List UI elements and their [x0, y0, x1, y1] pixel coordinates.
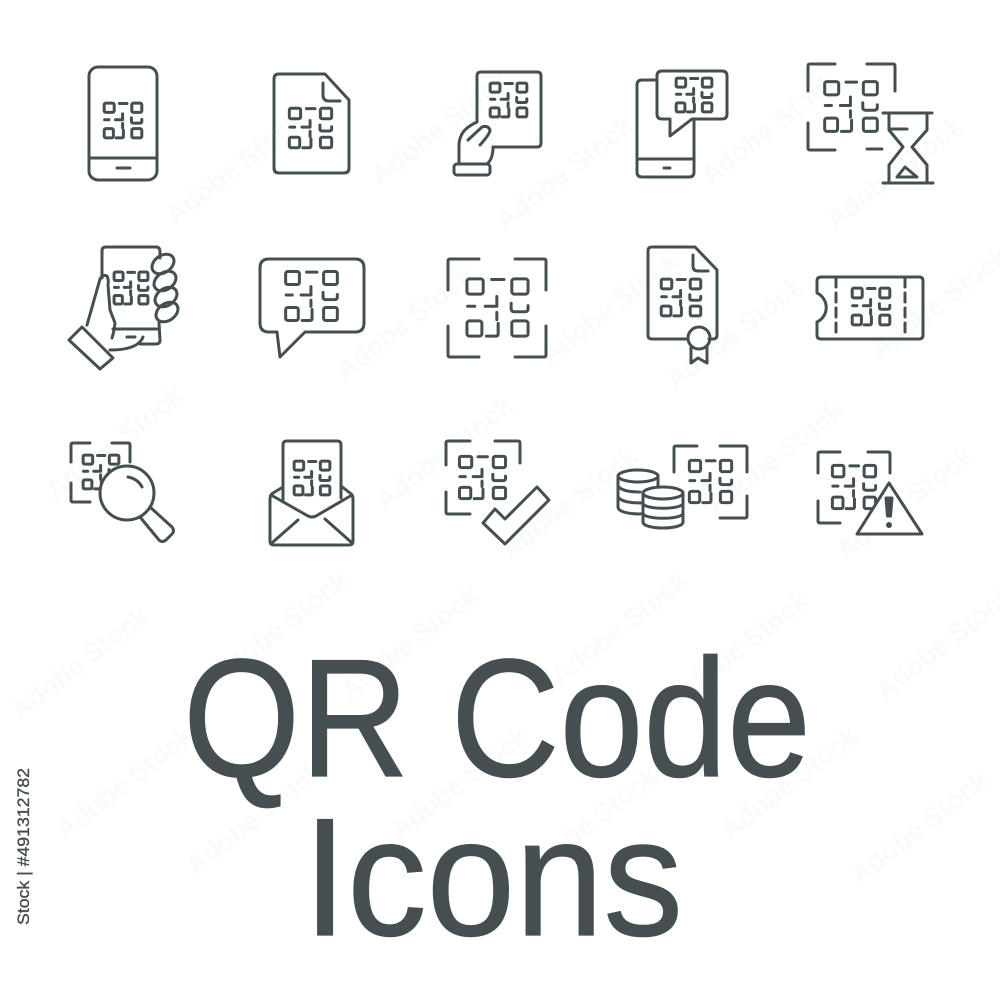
watermark: Adobe Stock	[330, 260, 479, 386]
watermark: Adobe Stock	[205, 565, 354, 691]
icon: hand holding QR card	[454, 72, 541, 175]
watermark: Adobe Stock	[495, 440, 644, 566]
watermark: Adobe Stock	[5, 600, 154, 726]
icon: smartphone with QR speech bubble	[637, 71, 727, 177]
watermark: Adobe Stock	[365, 65, 514, 191]
icon: QR code with warning triangle	[818, 452, 922, 534]
stock id: Stock | #491312782	[14, 768, 33, 925]
watermark: Adobe Stock	[515, 760, 664, 886]
watermark: Adobe Stock	[385, 720, 534, 846]
watermark: Adobe Stock	[820, 110, 969, 236]
icon: hand holding phone with QR code	[69, 247, 182, 369]
title: Icons	[303, 783, 683, 971]
watermark: Adobe Stock	[335, 580, 484, 706]
watermark: Adobe Stock	[660, 270, 809, 396]
watermark: Adobe Stock	[545, 565, 694, 691]
watermark: Adobe Stock	[535, 245, 684, 371]
title: QR Code	[183, 624, 811, 812]
watermark: Adobe Stock	[695, 65, 844, 191]
watermark: Adobe Stock	[370, 390, 519, 516]
icon: QR scan with hourglass	[808, 64, 933, 183]
watermark: Adobe Stock	[180, 755, 329, 881]
watermark: Adobe Stock	[845, 765, 994, 891]
watermark: Adobe Stock	[665, 585, 814, 711]
icon: envelope with QR code	[270, 441, 353, 545]
icon: speech bubble with QR code	[260, 259, 364, 357]
watermark: Adobe Stock	[830, 440, 979, 566]
icon: QR code with magnifying glass	[71, 443, 174, 542]
icon: smartphone with QR code	[89, 67, 157, 180]
icon: ticket with QR code	[817, 277, 923, 339]
watermark: Adobe Stock	[490, 110, 639, 236]
icon: certified QR document	[648, 247, 717, 363]
watermark: Adobe Stock	[715, 720, 864, 846]
icon: document with QR code	[274, 74, 349, 173]
icon: QR code with check mark	[446, 441, 549, 544]
title	[183, 624, 811, 971]
watermark: Adobe Stock	[40, 380, 189, 506]
icon: QR scan frame	[448, 259, 546, 357]
watermark: Adobe Stock	[50, 720, 199, 846]
watermark: Adobe Stock	[160, 105, 309, 231]
icon: coins with QR code	[618, 446, 747, 528]
watermark: Adobe Stock	[700, 395, 849, 521]
